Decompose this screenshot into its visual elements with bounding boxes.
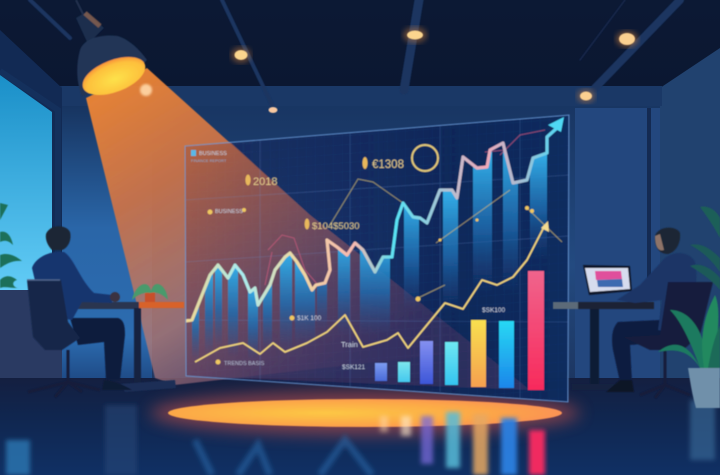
thin gold trend lines xyxy=(330,179,562,298)
head xyxy=(655,228,680,254)
floor xyxy=(0,378,720,475)
holographic chart panel: TRENDS BASIS xyxy=(224,361,265,367)
holographic chart panel: Train xyxy=(341,340,358,349)
gold ring xyxy=(412,145,438,171)
holographic chart panel: $SK121 xyxy=(342,364,366,371)
holographic chart panel: $SK100 xyxy=(482,307,506,314)
torso xyxy=(32,252,112,320)
holographic chart panel: BUSINESS xyxy=(199,151,227,157)
ceiling spotlights xyxy=(231,27,638,113)
window xyxy=(0,75,52,290)
ceiling xyxy=(0,0,720,88)
laptop xyxy=(583,265,632,295)
panel labels: €1308 xyxy=(372,159,404,171)
yellow arrow head xyxy=(541,221,549,232)
panel grid lines xyxy=(185,118,569,400)
left worker at desk xyxy=(0,203,184,397)
thin red trend lines xyxy=(265,130,545,285)
torso xyxy=(617,253,696,335)
orange light falling on the panel xyxy=(185,142,530,390)
cyan arrow head xyxy=(548,117,564,132)
plant xyxy=(658,207,720,408)
pot xyxy=(688,368,720,408)
holographic chart panel: $1K 100 xyxy=(297,315,322,322)
bar chart xyxy=(375,271,544,390)
holographic chart panel xyxy=(185,115,569,402)
panel labels: $104$5030 xyxy=(312,221,360,232)
holographic chart panel: FINANCE REPORT xyxy=(191,158,227,163)
right worker at desk xyxy=(553,207,720,408)
plants by window xyxy=(0,203,22,288)
light cone xyxy=(86,68,480,385)
yellow trend line xyxy=(195,225,545,362)
panel labels xyxy=(253,159,404,232)
legs xyxy=(70,318,125,380)
panel labels: 2018 xyxy=(253,176,277,188)
floor reflections xyxy=(6,400,715,475)
chair xyxy=(623,282,713,350)
legs xyxy=(612,320,665,382)
spot of light on floor xyxy=(150,391,580,435)
main cyan growth line xyxy=(185,128,557,321)
blue area columns xyxy=(192,143,547,360)
left wall xyxy=(0,30,62,385)
small plant xyxy=(132,284,168,302)
ceiling beams xyxy=(30,0,680,105)
desk xyxy=(553,302,580,309)
right wall xyxy=(660,48,720,385)
chair xyxy=(27,280,80,350)
desk xyxy=(75,302,140,309)
back wall xyxy=(60,86,660,386)
head xyxy=(46,226,71,250)
hanging lamp xyxy=(76,0,152,103)
data dots xyxy=(208,206,534,364)
holographic chart panel: BUSINESS xyxy=(215,209,243,215)
coin markers xyxy=(245,157,368,230)
